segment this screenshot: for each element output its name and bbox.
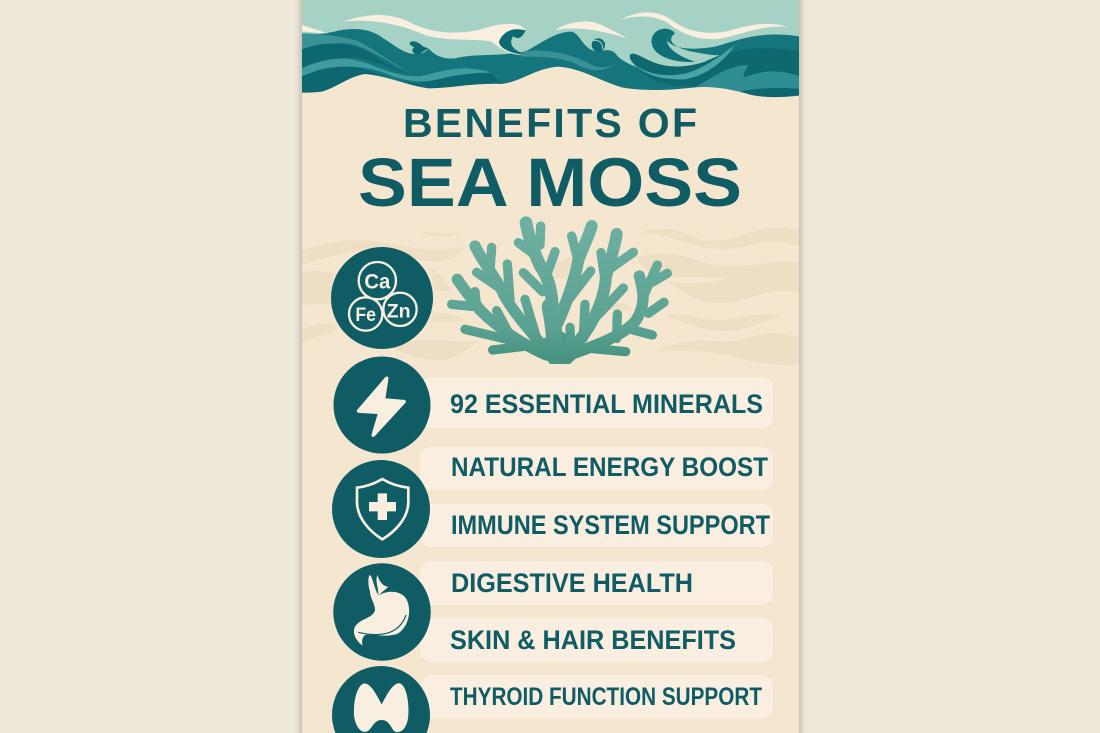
benefit pill: 92 essential minerals	[420, 377, 773, 428]
main wave body	[302, 29, 692, 90]
poster shadow	[300, 0, 801, 733]
benefit pill: digestive health	[420, 561, 773, 605]
light teal bands	[295, 33, 412, 73]
sand below waves	[295, 67, 805, 110]
benefit pill: thyroid function support: THYROID FUNCTION SUPPORT	[450, 683, 762, 711]
sand ripples	[300, 227, 813, 365]
title line: sea moss: SEA MOSS	[358, 144, 742, 221]
benefit pill: skin and hair benefits	[420, 618, 773, 662]
icon: thyroid	[332, 666, 430, 733]
icon: minerals Ca Fe Zn: Ca	[364, 269, 390, 293]
illustration: sea moss coral	[452, 223, 667, 364]
icon: energy bolt	[334, 356, 430, 454]
icon: minerals Ca Fe Zn: Zn	[387, 301, 411, 322]
benefit pill: immune system support	[420, 504, 773, 547]
poster panel	[302, 110, 799, 733]
benefit pill: natural energy boost	[420, 447, 773, 490]
mid and light bands over the dark	[295, 59, 492, 81]
benefit pill: digestive health: DIGESTIVE HEALTH	[451, 568, 693, 598]
icon: stomach	[333, 563, 431, 661]
dark wave bands	[302, 44, 409, 74]
benefit pill: skin and hair benefits: SKIN & HAIR BENEFITS	[450, 625, 736, 655]
benefit pill: immune system support: IMMUNE SYSTEM SUPPORT	[451, 510, 770, 540]
wave header	[302, 0, 799, 98]
icon: minerals Ca Fe Zn: Fe	[355, 305, 376, 326]
curl 3 wave band	[652, 29, 805, 62]
wave curls	[499, 29, 527, 55]
icon: minerals Ca Fe Zn	[331, 247, 433, 349]
foam crests	[295, 12, 788, 55]
benefit pill: 92 essential minerals: 92 ESSENTIAL MINERALS	[450, 389, 763, 419]
icon: immune shield	[332, 460, 430, 558]
title line: benefits of: BENEFITS OF	[403, 100, 697, 146]
benefit pill: natural energy boost: NATURAL ENERGY BOOST	[451, 452, 768, 482]
title	[358, 100, 742, 221]
benefit pill: thyroid function support	[420, 675, 773, 718]
